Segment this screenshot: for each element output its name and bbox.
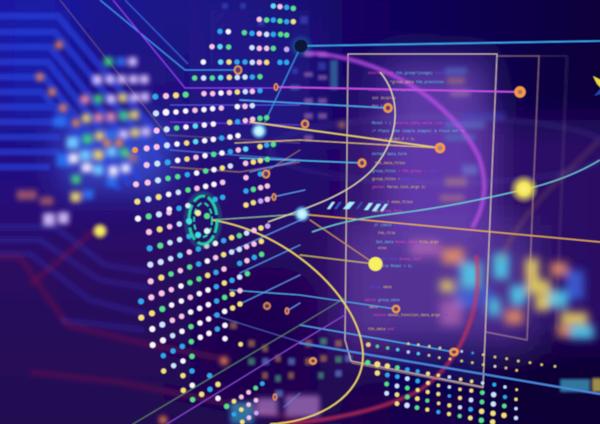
dashed data strip	[327, 202, 388, 211]
code listing: Set_data Modal_data file_args	[376, 240, 439, 245]
colored dot matrix, lower	[135, 210, 270, 424]
code listing: file Modal = 1;	[380, 264, 412, 269]
code listing: gmodal Parse_list_args 1;	[372, 185, 426, 190]
orange blurred highlights	[36, 41, 345, 424]
glowing cyan node middle	[293, 205, 311, 223]
dark hub node	[292, 37, 310, 55]
code listing: for (	[372, 104, 383, 109]
cyan arc	[312, 160, 600, 232]
colored dot matrix, upper	[132, 3, 296, 212]
code listing: fdk_file	[378, 231, 395, 236]
blurred yellow node left	[91, 222, 109, 240]
code listing: static_data Parse_list	[368, 88, 415, 93]
blurred heat-map blocks, right	[410, 240, 594, 339]
orange nodes	[234, 66, 524, 400]
code listing: Modal = ( generic_data_value_list { new_value }	[372, 121, 473, 126]
code listing: group_data	[370, 285, 392, 290]
code listing: if (data group_files	[374, 223, 417, 228]
code listing: /* Use = demo_files	[372, 200, 413, 205]
left circuit traces, blurred	[0, 16, 300, 420]
code listing: Modal = modal_F = 1;	[372, 137, 415, 142]
code listing: group_files = demo	[372, 177, 411, 182]
code listing: fdk_data end	[368, 327, 394, 332]
code listing: group_files = fdk_group = _demo	[372, 169, 439, 174]
glowing yellow node right	[509, 174, 539, 204]
glowing cyan node upper	[250, 122, 268, 140]
code listing: return modal_function_data_args fdk	[373, 313, 449, 318]
yellow arc	[212, 220, 363, 424]
code listing: #ifdef data_form	[372, 152, 407, 157]
blurred top-centre data grid	[222, 3, 338, 141]
yellow node centre	[368, 257, 382, 271]
code listing: while group_data	[365, 298, 400, 303]
pink and red sweep arcs	[270, 53, 600, 424]
code listing: data	[369, 305, 378, 310]
code listing: int display	[372, 96, 397, 101]
code listing: /* Place some simple shapes: A fluid set */	[372, 129, 465, 134]
yellow star fragment at right edge	[593, 76, 600, 96]
green target ring	[186, 193, 220, 247]
lavender blurred squares	[43, 212, 69, 226]
code listing: #include_fdk fdk_group*(usage) #define	[368, 71, 450, 76]
blurred upper-left data grid	[17, 57, 150, 226]
blurred lower-centre data grid	[230, 322, 352, 397]
code listing: else	[378, 246, 387, 251]
code listing: fdk_data Group_list	[380, 257, 421, 262]
code listing	[365, 71, 473, 332]
code listing: *group_data fdk_practices	[390, 80, 444, 85]
small dot field, bottom right	[365, 342, 556, 424]
connection lines	[133, 41, 600, 424]
code listing: fdk_data_files	[375, 161, 405, 166]
code listing: fdk group_file	[372, 209, 402, 214]
blurred strip lower right	[560, 378, 600, 392]
bright circuit lines	[60, 0, 300, 172]
pale data panel stack	[345, 54, 567, 387]
blurred bottom blocks	[230, 395, 320, 424]
blurred colour blocks behind panel	[440, 68, 505, 201]
pale arc	[268, 72, 395, 222]
